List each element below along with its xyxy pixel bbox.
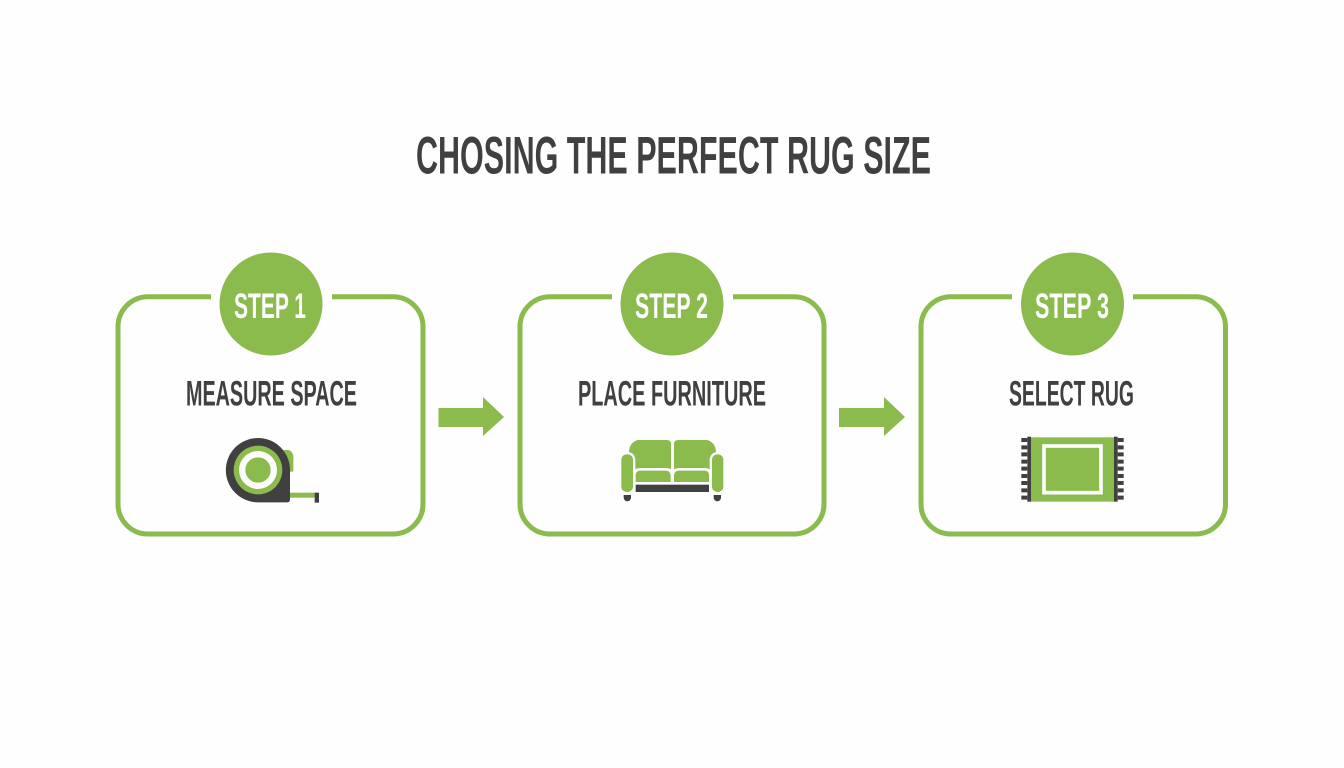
panel outline 3 xyxy=(921,297,1226,534)
heading: place furniture: PLACE FURNITURE xyxy=(578,374,766,414)
arrow: step 1 to step 2 xyxy=(438,397,504,436)
icon: rug xyxy=(1021,437,1124,502)
panel outline 2 xyxy=(520,297,824,534)
panel: step 1 measure space xyxy=(118,252,423,534)
step 2 badge: STEP 2 xyxy=(635,287,708,326)
step 3 badge xyxy=(1021,252,1124,356)
step 1 badge: STEP 1 xyxy=(234,287,306,326)
heading: select rug: SELECT RUG xyxy=(1009,374,1134,414)
heading: measure space: MEASURE SPACE xyxy=(186,374,357,414)
icon: sofa xyxy=(621,440,723,501)
icon: tape measure xyxy=(226,438,319,503)
step 1 badge xyxy=(220,252,322,356)
title: CHOSING THE PERFECT RUG SIZE xyxy=(416,126,931,186)
arrow: step 2 to step 3 xyxy=(839,397,905,436)
panel: step 3 select rug xyxy=(921,252,1226,534)
step 3 badge: STEP 3 xyxy=(1035,287,1109,326)
panel outline 1 xyxy=(118,297,423,534)
step 2 badge xyxy=(620,252,724,356)
panel: step 2 place furniture xyxy=(520,252,824,534)
